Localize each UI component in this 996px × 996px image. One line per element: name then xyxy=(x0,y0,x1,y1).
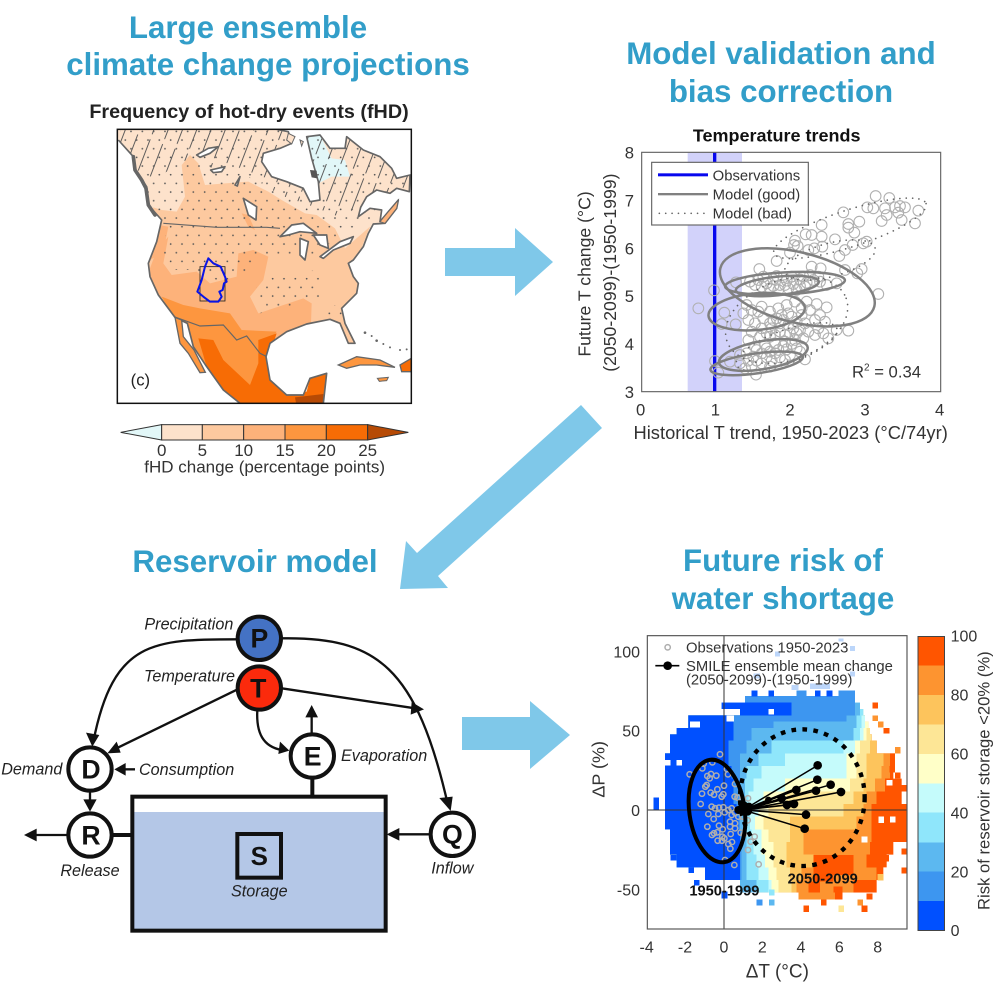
1950-1999 ellipse xyxy=(682,756,752,866)
bahamas specks xyxy=(364,331,408,351)
observed uncertainty band xyxy=(688,152,742,392)
node: evaporation xyxy=(291,734,334,778)
scatter axis labels: Future T change (°C) xyxy=(575,191,595,357)
scatter legend xyxy=(652,162,808,225)
panel label c: (c) xyxy=(131,370,150,389)
scatter axis labels: 1 xyxy=(711,400,720,419)
colour bar labels: Risk of reservoir storage <20% (%) xyxy=(975,651,994,910)
crosshair axes xyxy=(647,636,907,929)
title: model validation and bias correction: Model validation and xyxy=(626,36,936,71)
heatmap axis labels: 8 xyxy=(873,940,882,957)
pacific coast islands xyxy=(133,157,155,215)
scatter axis labels: 7 xyxy=(625,191,634,210)
heatmap axis labels: 6 xyxy=(835,940,844,957)
arrow: validation to reservoir model xyxy=(400,405,602,589)
map of North America xyxy=(117,129,411,407)
title: model validation and bias correction xyxy=(626,36,936,109)
ensemble change dots xyxy=(734,761,845,833)
colour bar labels: 5 xyxy=(198,441,207,460)
diagram labels: Precipitation xyxy=(144,615,233,633)
scatter heading: Temperature trends xyxy=(693,126,860,146)
node: evaporation: E xyxy=(304,741,322,771)
scatter axis labels: = 0.34 xyxy=(870,362,921,381)
diagram labels: Temperature xyxy=(144,668,235,686)
colour bar labels: 40 xyxy=(951,805,969,822)
period labels: 1950-1999 xyxy=(689,884,759,900)
node: release: R xyxy=(81,820,101,850)
colour bar labels: 0 xyxy=(157,441,166,460)
map heading: Frequency of hot-dry events (fHD) xyxy=(89,101,409,123)
title: model validation and bias correction: bias correction xyxy=(669,74,893,109)
colour bar labels: 25 xyxy=(358,441,377,460)
heatmap axis labels: -2 xyxy=(678,940,692,957)
arrow: projections to validation xyxy=(445,228,553,296)
colour bar labels: 0 xyxy=(951,923,960,940)
title: large ensemble climate change projections: climate change projections xyxy=(66,47,470,82)
heatmap legend: SMILE ensemble mean change xyxy=(686,659,893,675)
scatter axis labels: 8 xyxy=(625,144,634,163)
scatter axis labels: 2 xyxy=(864,363,870,374)
heatmap chart: future risk of water shortage xyxy=(589,629,994,983)
title: future risk of water shortage: Future risk of xyxy=(683,543,884,578)
node: inflow: Q xyxy=(442,820,463,850)
scatter axis labels: 3 xyxy=(860,400,870,419)
colour bar labels xyxy=(951,629,994,940)
diagram labels: Demand xyxy=(1,760,63,778)
node: precipitation xyxy=(238,617,281,660)
node: storage: S xyxy=(251,841,268,871)
arrowheads xyxy=(24,702,453,841)
arrow: reservoir model to future risk xyxy=(462,701,570,769)
heatmap axis labels: -4 xyxy=(640,940,654,957)
scatter axis labels: 4 xyxy=(625,335,634,354)
diagram labels: Release xyxy=(60,862,120,880)
borders xyxy=(163,223,280,357)
heatmap axis labels: 4 xyxy=(797,940,806,957)
node: demand xyxy=(68,747,112,791)
2050-2099 ellipse xyxy=(740,729,865,866)
baja california xyxy=(175,317,205,373)
model circles xyxy=(693,191,924,380)
nova scotia xyxy=(380,200,398,223)
node: temperature: T xyxy=(250,673,266,703)
heatmap legend xyxy=(655,640,893,688)
diagram labels xyxy=(1,615,475,901)
scatter legend: Model (bad) xyxy=(713,207,792,223)
diagram labels: Evaporation xyxy=(341,747,427,765)
colour bar labels: fHD change (percentage points) xyxy=(144,458,385,477)
connecting lines xyxy=(33,638,448,835)
basin outline xyxy=(200,267,225,301)
colour bar labels: 10 xyxy=(234,441,253,460)
scatter axis labels: 0 xyxy=(636,400,645,419)
heatmap legend: Observations 1950-2023 xyxy=(686,640,848,656)
colour bar labels xyxy=(144,441,385,477)
ensemble change lines xyxy=(743,765,841,829)
observed points xyxy=(687,752,761,868)
colour bar labels: 100 xyxy=(951,629,977,646)
scatter axis labels: 5 xyxy=(625,287,634,306)
heatmap axis labels xyxy=(589,644,882,983)
map colour bar xyxy=(121,425,408,440)
diagram labels: Storage xyxy=(231,883,288,901)
heatmap axis labels: 100 xyxy=(613,644,640,661)
scatter chart: temperature trends xyxy=(575,126,948,443)
heatmap axis labels: ΔP (%) xyxy=(589,741,609,798)
heatmap axis labels: 0 xyxy=(720,940,729,957)
extra red cells xyxy=(813,855,853,882)
colour bar labels: 80 xyxy=(951,688,969,705)
scatter axis labels: 6 xyxy=(625,239,634,258)
node: release xyxy=(68,813,112,857)
scatter axis labels: (2050-2099)-(1950-1999) xyxy=(600,174,620,372)
colour bar labels: 20 xyxy=(317,441,336,460)
title: future risk of water shortage xyxy=(671,543,894,616)
title: reservoir model: Reservoir model xyxy=(132,544,378,579)
scatter legend: Observations xyxy=(713,168,800,184)
heatmap frame xyxy=(647,636,907,929)
period labels xyxy=(689,871,858,900)
reservoir tank xyxy=(132,797,386,931)
coastline xyxy=(118,129,410,403)
reservoir model diagram xyxy=(1,615,475,931)
hatching xyxy=(117,129,411,217)
observations line xyxy=(713,152,716,392)
scatter axis labels: 4 xyxy=(935,400,944,419)
scatter axis labels: 2 xyxy=(785,400,795,419)
heatmap axis labels: 50 xyxy=(622,724,640,741)
node: precipitation: P xyxy=(250,624,268,654)
lakes xyxy=(197,147,353,260)
colour bar labels: 15 xyxy=(276,441,294,460)
heatmap cells xyxy=(654,638,906,912)
node: temperature xyxy=(238,666,281,710)
map panel: frequency of hot-dry events xyxy=(89,101,411,477)
map frame xyxy=(117,129,411,403)
diagram labels: Inflow xyxy=(431,860,475,878)
arctic islands xyxy=(287,133,303,146)
node: storage xyxy=(237,834,281,878)
node: inflow xyxy=(431,813,474,856)
title: large ensemble climate change projections: Large ensemble xyxy=(129,10,367,45)
colour bar labels: 20 xyxy=(951,864,969,881)
period labels: 2050-2099 xyxy=(788,871,858,887)
risk colour bar xyxy=(918,636,944,930)
title: large ensemble climate change projections xyxy=(66,10,470,82)
scatter axis labels xyxy=(575,144,948,443)
heatmap axis labels: 0 xyxy=(631,803,640,820)
colour bar labels: 60 xyxy=(951,746,969,763)
cuba and caribbean islands xyxy=(338,357,395,368)
heatmap axis labels: 2 xyxy=(758,940,767,957)
scatter axis labels: Historical T trend, 1950-2023 (°C/74yr) xyxy=(634,422,948,443)
dotted ellipses: bad models xyxy=(713,186,932,381)
stippling xyxy=(120,130,411,323)
heatmap axis labels: ΔT (°C) xyxy=(746,962,809,983)
scatter frame xyxy=(642,152,941,392)
scatter legend: Model (good) xyxy=(713,188,800,204)
heatmap legend: (2050-2099)-(1950-1999) xyxy=(686,672,853,688)
diagram labels: Consumption xyxy=(139,761,234,779)
node: demand: D xyxy=(81,754,101,784)
scatter axis labels: R xyxy=(852,362,864,381)
scatter axis labels: 3 xyxy=(625,383,634,402)
scattered cells xyxy=(798,715,901,906)
title: future risk of water shortage: water shortage xyxy=(671,581,894,616)
heatmap axis labels: -50 xyxy=(617,882,640,899)
solid ellipses: good models xyxy=(707,234,883,380)
